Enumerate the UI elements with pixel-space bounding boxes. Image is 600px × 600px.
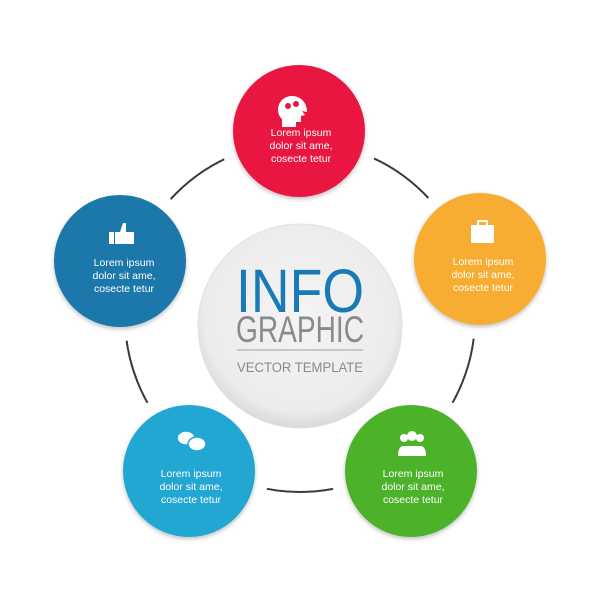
text: Lorem ipsum	[161, 468, 222, 480]
panel: green	[345, 405, 477, 537]
title INFO: INFO	[236, 257, 364, 325]
panel: orange	[414, 193, 546, 325]
text: Lorem ipsum	[383, 468, 444, 480]
icon: speech bubbles	[177, 431, 206, 451]
subtitle: VECTOR TEMPLATE	[237, 360, 363, 375]
white masks	[40, 51, 560, 551]
text: cosecte tetur	[453, 282, 514, 294]
text: cosecte tetur	[271, 153, 332, 165]
text: Lorem ipsum	[94, 257, 155, 269]
ring connector	[125, 142, 475, 492]
text: cosecte tetur	[94, 283, 155, 295]
text: cosecte tetur	[161, 494, 222, 506]
center circle	[198, 224, 402, 428]
icon: briefcase	[471, 221, 494, 243]
text: dolor sit ame,	[269, 140, 333, 152]
text: Lorem ipsum	[271, 127, 332, 139]
text: cosecte tetur	[383, 494, 444, 506]
icon: head gears	[278, 96, 307, 127]
panel: cyan	[123, 405, 255, 537]
text: dolor sit ame,	[159, 481, 223, 493]
panel: red	[233, 65, 365, 197]
text: Lorem ipsum	[453, 256, 514, 268]
icon: people	[398, 431, 426, 456]
panel: dark blue	[54, 195, 186, 327]
text: dolor sit ame,	[451, 269, 515, 281]
text: dolor sit ame,	[92, 270, 156, 282]
text: dolor sit ame,	[381, 481, 445, 493]
title GRAPHIC: GRAPHIC	[236, 309, 364, 350]
icon: thumbs up	[109, 223, 134, 244]
